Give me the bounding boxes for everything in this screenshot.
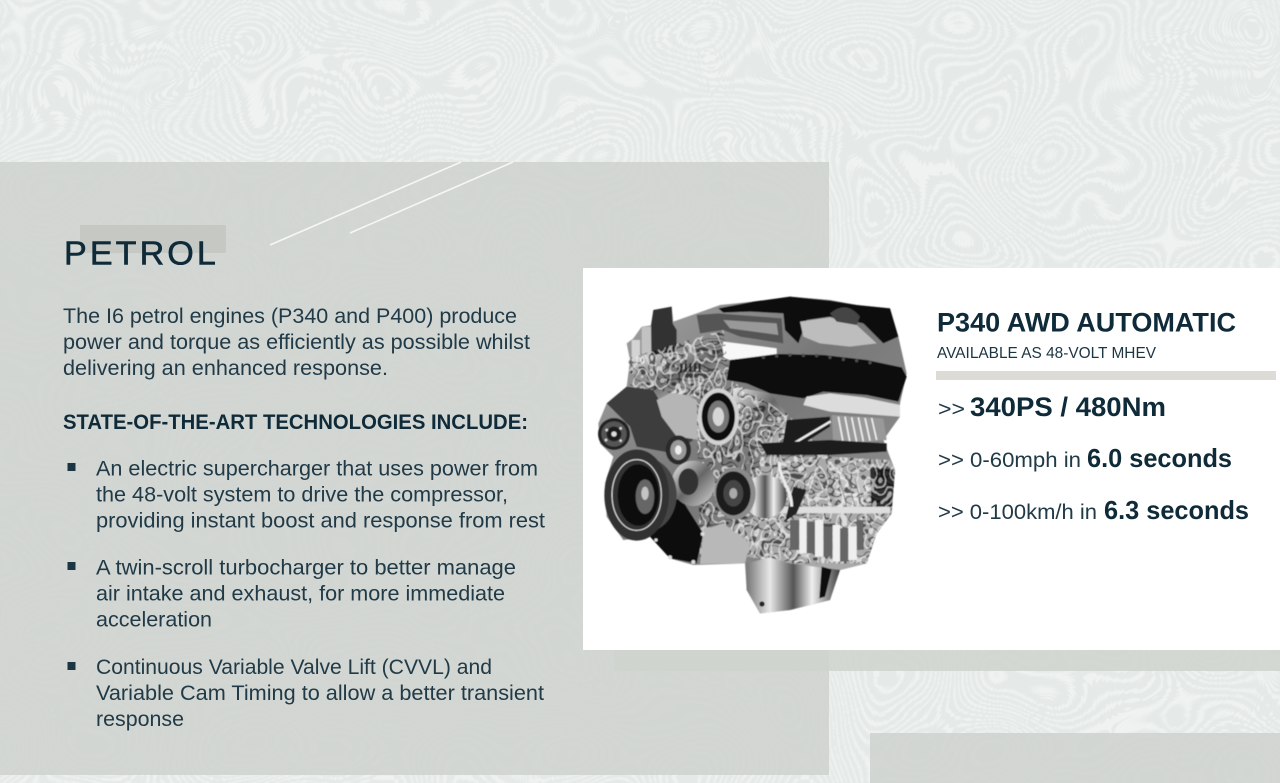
- large crank pulley: [604, 449, 677, 541]
- stat: 0-100km/h: >> 0-100km/h in: [938, 501, 1097, 524]
- stat: power and torque: 340PS / 480Nm: [970, 392, 1166, 422]
- filler cap: [651, 307, 677, 358]
- left dark housing: [607, 387, 693, 453]
- stat: 0-100km/h: [938, 495, 1249, 525]
- heading highlight block: [80, 225, 226, 253]
- alternator pulley: [698, 388, 739, 445]
- decorative white diagonal lines: [270, 162, 513, 245]
- bullet: twin-scroll turbocharger: air intake and exhaust, for more immediate: [96, 582, 505, 606]
- top dark hoses: [718, 297, 898, 343]
- bullet: electric supercharger: An electric supercharger that uses power from: [96, 458, 538, 480]
- bullet: CVVL: Variable Cam Timing to allow a better transient: [96, 682, 544, 705]
- supercharger ribbed body: [832, 415, 887, 445]
- bullet: CVVL: response: [96, 708, 184, 731]
- heading: P340 AWD AUTOMATIC: P340 AWD AUTOMATIC: [937, 308, 1236, 338]
- text block: introduction: power and torque as efficiently as possible whilst: [63, 331, 530, 354]
- upper small pulley: [598, 418, 630, 450]
- panel: lower right background block: [870, 733, 1280, 783]
- stat: 0-60mph: 6.0 seconds: [1087, 443, 1232, 473]
- subheading: availability: AVAILABLE AS 48-VOLT MHEV: [937, 345, 1156, 362]
- subheading: technologies: STATE-OF-THE-ART TECHNOLOGIES INCLUDE:: [63, 410, 528, 434]
- small idler pulley: [666, 435, 691, 465]
- stat: 0-100km/h: 6.3 seconds: [1104, 495, 1249, 525]
- bullet: CVVL: Continuous Variable Valve Lift (CVVL) and: [96, 656, 492, 679]
- alternator: [730, 387, 787, 450]
- divider bar: [936, 371, 1276, 380]
- text block: introduction: The I6 petrol engines (P340 and P400) produce: [63, 305, 517, 328]
- icon: engine illustration: [598, 297, 907, 613]
- bullet: electric supercharger: [68, 458, 545, 532]
- idler and AC pulleys: [672, 461, 715, 506]
- bullet: CVVL: [68, 656, 544, 731]
- stat: power and torque: >>: [938, 398, 965, 421]
- panel: petrol text background: [0, 162, 829, 775]
- lower timing cover: [650, 497, 703, 563]
- stat: 0-60mph: >> 0-60mph in: [938, 449, 1081, 472]
- bullet list: technologies: [68, 458, 545, 731]
- intake manifold black: [727, 354, 907, 402]
- upper bracket: [697, 313, 783, 343]
- upper left block: [628, 352, 723, 397]
- bullet: twin-scroll turbocharger: [68, 556, 516, 632]
- text block: introduction: delivering an enhanced response.: [63, 357, 388, 380]
- bullet: twin-scroll turbocharger: acceleration: [96, 608, 212, 632]
- lower engine block: [723, 457, 895, 570]
- bullet: twin-scroll turbocharger: A twin-scroll turbocharger to better manage: [96, 556, 516, 580]
- fine dark and bright detail texture: [628, 330, 895, 563]
- oil sump: [747, 557, 840, 613]
- sump webs: [790, 520, 863, 562]
- panel: white engine card: [583, 268, 1280, 650]
- stat: 0-60mph: [938, 443, 1232, 473]
- bullet: electric supercharger: providing instant boost and response from rest: [96, 510, 545, 532]
- text block: introduction: [63, 305, 530, 380]
- bullet: electric supercharger: the 48-volt system to drive the compressor,: [96, 484, 508, 506]
- panel: card shadow band: [614, 650, 1280, 671]
- title: PETROL: PETROL: [64, 234, 219, 272]
